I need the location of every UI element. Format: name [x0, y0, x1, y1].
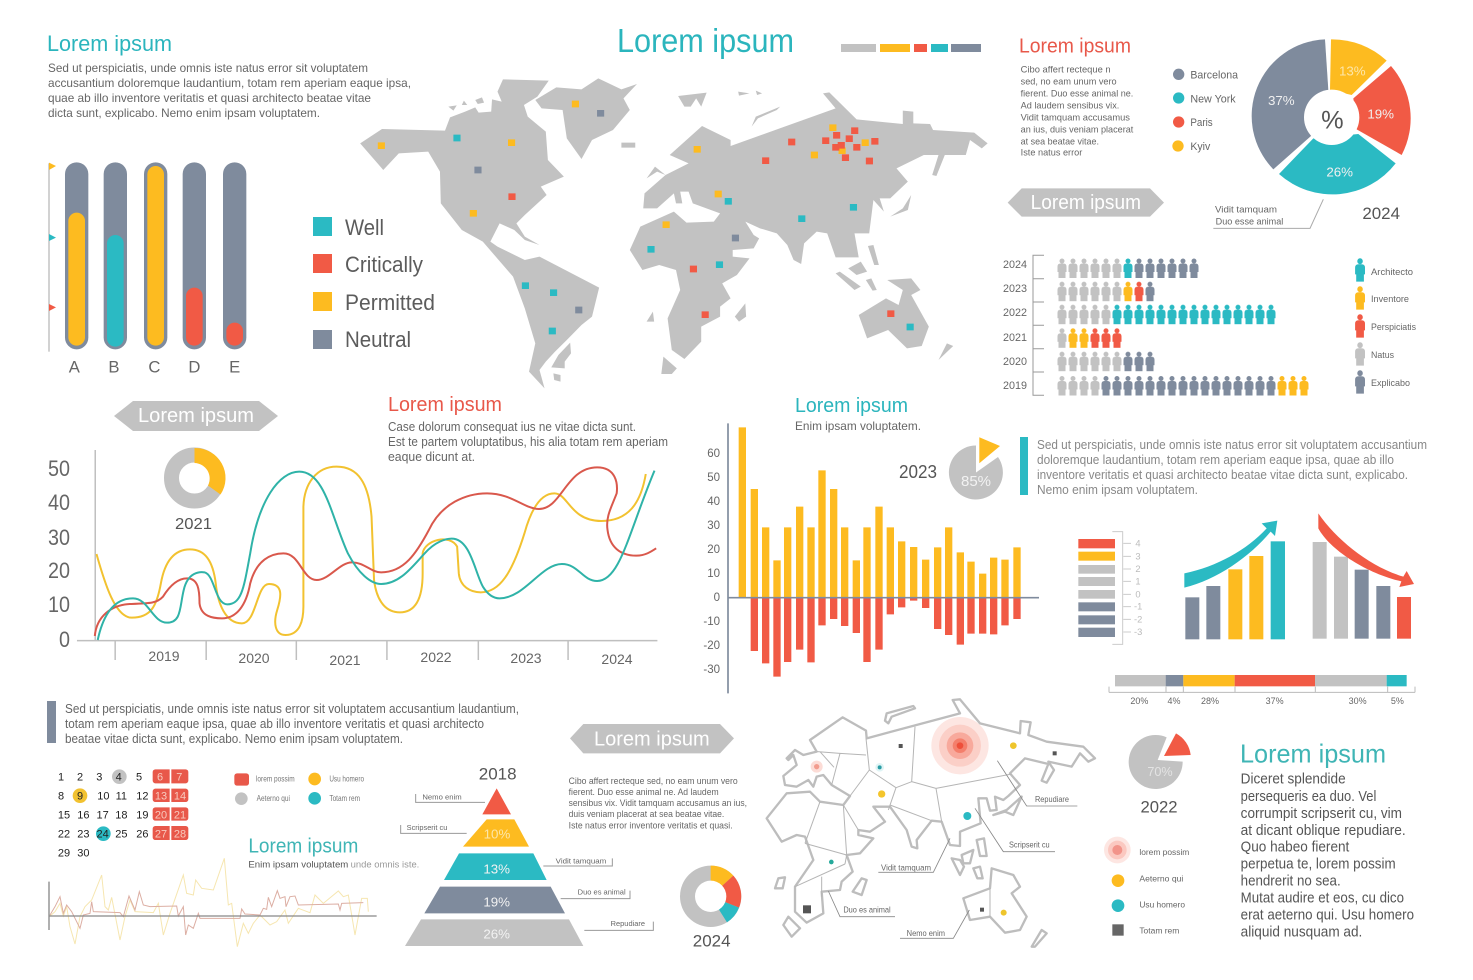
- chart: scale stack and trend bars: 4: [1135, 538, 1141, 548]
- chart: sparkline: [49, 858, 377, 947]
- chart: people pictogram: 2021: [1003, 332, 1027, 344]
- panel: top-left intro text: [47, 31, 411, 120]
- calendar: 21: [174, 809, 186, 821]
- text block: bottom-right: perpetua te, lorem possim: [1241, 857, 1396, 873]
- panel: top-right pie and text: fierent. Duo esse animal ne.: [1021, 88, 1133, 98]
- chart: scale stack and trend bars: 1: [1135, 576, 1141, 586]
- panel: top-right pie and text: sed, no eam unum vero: [1021, 76, 1117, 86]
- pyramid 2018: 10%: [484, 827, 510, 842]
- chart: multi-line curves 2019-2024: 20: [48, 558, 70, 583]
- panel: top-left intro text: quae ab illo inventore veritatis et quasi architecto beatae vitae: [48, 91, 371, 105]
- chart: vertical capsule bars A-E: [48, 162, 246, 377]
- chart: people pictogram: 2020: [1003, 356, 1027, 368]
- pie: 2023: 2023: [899, 462, 937, 482]
- chart: scale stack and trend bars: 3: [1135, 551, 1141, 561]
- panel: top-right pie and text: 37%: [1268, 93, 1295, 108]
- legend: people: Perspiciatis: [1371, 322, 1416, 333]
- heading: bar chart: Enim ipsam voluptatem.: [795, 419, 921, 433]
- chart: multi-line curves 2019-2024: 2020: [238, 650, 270, 666]
- calendar: 5: [136, 772, 142, 784]
- panel: top-right pie and text: Cibo affert recteque n: [1021, 64, 1111, 74]
- calendar: 14: [174, 791, 186, 803]
- chart: diverging bars: 30: [707, 520, 720, 532]
- text block: teal note: Sed ut perspiciatis, unde omnis iste natus error sit voluptatem accusantium: [1037, 438, 1427, 452]
- calendar: 19: [136, 809, 148, 821]
- heading: bar chart: [795, 395, 921, 433]
- chart: scale stack and trend bars: -3: [1134, 627, 1142, 637]
- legend: map status: Permitted: [345, 290, 435, 315]
- chart: diverging bars: 40: [707, 496, 720, 508]
- pyramid 2018: 19%: [483, 895, 510, 910]
- text block: teal note: Nemo enim ipsam voluptatem.: [1037, 483, 1198, 497]
- panel: top-left intro text: dicta sunt, explicabo. Nemo enim ipsam voluptatem.: [48, 106, 320, 120]
- text block: bottom-right: erat aeterno qui. Usu homero: [1241, 908, 1414, 924]
- chart: people pictogram: 2024: [1003, 259, 1027, 271]
- panel: top-right pie and text: at sea beatae vitae.: [1021, 136, 1099, 146]
- calendar: 2: [77, 772, 83, 784]
- pyramid 2018: Scripserit cu: [407, 823, 447, 832]
- chart: multi-line curves 2019-2024: 10: [48, 592, 70, 617]
- pyramid 2018: 13%: [483, 861, 510, 876]
- chart: diverging bars: [703, 423, 1039, 693]
- labels: outline map: Duo es animal: [843, 905, 891, 915]
- calendar: 6: [157, 772, 163, 784]
- calendar: 8: [58, 791, 64, 803]
- panel: top-right pie and text: New York: [1190, 93, 1236, 105]
- panel: top-right pie and text: 19%: [1367, 106, 1394, 121]
- text block: bottom-right: persequeris ea duo. Vel: [1241, 789, 1376, 805]
- chart: people pictogram: [1003, 255, 1310, 397]
- legend: calendar keys: Aeterno qui: [257, 794, 290, 803]
- chart: stacked percentage strip: 20%: [1130, 696, 1148, 706]
- text block: bottom-right: aliquid nusquam ad.: [1241, 925, 1362, 941]
- legend: map status: [313, 215, 435, 352]
- pyramid 2018: 2018: [479, 764, 517, 783]
- calendar: 27: [155, 829, 167, 841]
- chart: vertical capsule bars A-E: E: [229, 358, 240, 377]
- heading: sparkline: [248, 835, 419, 869]
- banner: [570, 724, 734, 753]
- text block: line chart note: Case dolorum consequat ius ne vitae dicta sunt.: [388, 420, 636, 434]
- text block: bottom-right: Mutat audire et eos, cu dico: [1241, 891, 1404, 907]
- labels: outline map: Scripserit cu: [1009, 840, 1050, 850]
- chart: multi-line curves 2019-2024: 2022: [420, 649, 452, 665]
- banner: Lorem ipsum: [594, 728, 710, 751]
- heading: bar chart: Lorem ipsum: [795, 395, 908, 417]
- legend: outline map: Aeterno qui: [1139, 873, 1183, 883]
- calendar: 18: [115, 809, 127, 821]
- chart: scale stack and trend bars: -1: [1134, 602, 1142, 612]
- donut: 2021: 2021: [175, 516, 212, 533]
- chart: diverging bars: -10: [703, 616, 720, 628]
- panel: bottom-right pie, legend and text: [1104, 733, 1414, 941]
- banner: line chart heading: [114, 401, 278, 431]
- calendar: 20: [155, 809, 167, 821]
- chart: multi-line curves 2019-2024: 2023: [510, 650, 542, 666]
- pie: 2022: [1129, 733, 1191, 816]
- chart: multi-line curves 2019-2024: 0: [59, 627, 70, 652]
- text block: pyramid note: sensibus vix. Vidit tamquam accusamus an ius,: [569, 798, 747, 808]
- calendar: 25: [115, 829, 127, 841]
- text block: teal note: inventore veritatis et quasi architecto beatae vitae dicta sunt, explicabo.: [1037, 468, 1408, 482]
- text block: line chart note: Est te partem voluptatibus, his alia totam rem aperiam: [388, 435, 668, 449]
- calendar: 17: [97, 809, 109, 821]
- legend: outline map: lorem possim: [1139, 847, 1189, 857]
- chart: diverging bars: 0: [714, 592, 720, 604]
- markers: outline map: [803, 717, 1057, 916]
- legend: calendar keys: Usu homero: [329, 774, 364, 783]
- legend: people: Explicabo: [1371, 378, 1410, 389]
- chart: diverging bars: -30: [703, 664, 720, 676]
- chart: diverging bars: -20: [703, 640, 720, 652]
- text block: line chart note: [388, 394, 668, 464]
- legend: map status: Well: [345, 215, 384, 240]
- panel: top-right pie and text: Ad laudem sensibus vix.: [1021, 100, 1119, 110]
- panel: top-right pie and text: 26%: [1326, 164, 1353, 179]
- chart: diverging bars: 50: [707, 472, 720, 484]
- pyramid 2018: [401, 764, 653, 946]
- text block: bottom-right: Lorem ipsum: [1240, 739, 1386, 769]
- chart: people pictogram: 2023: [1003, 283, 1027, 295]
- calendar: 4: [116, 772, 122, 784]
- calendar: 22: [58, 829, 70, 841]
- panel: top-right pie and text: %: [1321, 106, 1344, 134]
- pyramid 2018: 26%: [483, 926, 510, 941]
- calendar: 9: [77, 791, 83, 803]
- pie: 2022: 2022: [1140, 797, 1178, 816]
- panel: top-right pie and text: Paris: [1190, 117, 1213, 129]
- chart: stacked percentage strip: [1109, 675, 1415, 706]
- panel: pyramid, banner, note and donut: [401, 724, 747, 951]
- calendar: 28: [174, 829, 186, 841]
- calendar: 1: [58, 772, 64, 784]
- text block: pyramid note: [569, 776, 747, 830]
- calendar: 15: [58, 809, 70, 821]
- chart: vertical capsule bars A-E: C: [148, 358, 160, 377]
- panel: top-left intro text: Lorem ipsum: [47, 31, 172, 56]
- pie: 2023: 85%: [961, 473, 991, 490]
- chart: multi-line curves 2019-2024: 50: [48, 456, 70, 481]
- chart: people pictogram: 2019: [1003, 380, 1027, 392]
- calendar: 10: [97, 791, 109, 803]
- pie: 2022: 70%: [1147, 765, 1173, 779]
- text block: pyramid note: Iste natus error inventore veritatis et quasi.: [569, 820, 733, 830]
- legend: people: Natus: [1371, 350, 1394, 361]
- calendar: 24: [97, 829, 109, 841]
- chart: diverging bars: 60: [707, 448, 720, 460]
- chart: scale stack and trend bars: -2: [1134, 614, 1142, 624]
- legend: outline map: Totam rem: [1139, 925, 1179, 935]
- pyramid 2018: Nemo enim: [422, 792, 462, 801]
- pyramid 2018: Repudiare: [611, 919, 645, 928]
- panel: top-right pie and text: an ius, duis veniam placerat: [1021, 124, 1134, 134]
- calendar: 11: [116, 791, 127, 803]
- calendar: 3: [96, 772, 102, 784]
- chart: multi-line curves 2019-2024: 2019: [148, 648, 180, 664]
- legend: outline map: Usu homero: [1139, 899, 1185, 909]
- legend: people: [1355, 258, 1416, 394]
- chart: multi-line curves 2019-2024: [48, 450, 657, 668]
- chart: vertical capsule bars A-E: A: [69, 358, 81, 377]
- panel: top-right pie and text: Vidit tamquam accusamus: [1021, 112, 1130, 122]
- heading: sparkline: unde omnis iste.: [351, 859, 419, 869]
- legend: calendar keys: [234, 773, 364, 805]
- chart: people pictogram: 2022: [1003, 307, 1027, 319]
- chart: stacked percentage strip: 37%: [1266, 696, 1284, 706]
- legend: calendar keys: lorem possim: [256, 774, 295, 783]
- text block: teal note: [1020, 437, 1427, 497]
- chart: multi-line curves 2019-2024: 30: [48, 525, 70, 550]
- legend: calendar keys: Totam rem: [329, 794, 360, 803]
- banner: line chart heading: Lorem ipsum: [138, 405, 254, 427]
- calendar: 26: [136, 829, 148, 841]
- outline map with callouts: [767, 699, 1095, 947]
- chart: vertical capsule bars A-E: D: [188, 358, 200, 377]
- panel: top-left intro text: accusantium doloremque laudantium, totam rem aperiam eaque ipsa,: [48, 76, 411, 90]
- panel: top-left intro text: Sed ut perspiciatis, unde omnis iste natus error sit voluptatem: [48, 61, 368, 75]
- title colour strip: [841, 44, 981, 52]
- labels: outline map: Vidit tamquam: [881, 862, 931, 872]
- chart: stacked percentage strip: 5%: [1391, 696, 1404, 706]
- legend: people: Inventore: [1371, 294, 1409, 305]
- calendar: 7: [176, 772, 182, 784]
- panel: top-right pie and text: Vidit tamquam: [1215, 205, 1277, 215]
- chart: scale stack and trend bars: 2: [1135, 564, 1141, 574]
- heading: sparkline: Lorem ipsum: [248, 835, 358, 857]
- labels: outline map: Nemo enim: [907, 928, 945, 938]
- donut: 2024: [680, 866, 741, 951]
- text block: bottom-right: [1240, 739, 1414, 941]
- panel: top-right pie and text: Lorem ipsum: [1019, 36, 1131, 58]
- calendar: 16: [77, 809, 89, 821]
- legend: outline map: [1104, 837, 1189, 936]
- calendar: 13: [155, 791, 167, 803]
- donut: 2024: 2024: [693, 932, 731, 951]
- chart: diverging bars: 10: [707, 568, 720, 580]
- text block: pyramid note: duis veniam placerat at sea beatae vitae.: [569, 809, 724, 819]
- calendar: 30: [77, 848, 89, 860]
- panel: top-right pie and text: Kyiv: [1190, 141, 1211, 153]
- text block: bottom-right: hendrerit no sea.: [1241, 874, 1341, 890]
- text block: lower-left note: totam rem aperiam eaque ipsa, quae ab illo inventore veritatis et quasi architecto: [65, 717, 484, 731]
- text block: line chart note: Lorem ipsum: [388, 394, 502, 416]
- calendar: 12: [136, 791, 148, 803]
- calendar: 29: [58, 848, 70, 860]
- panel: top-right pie and text: Barcelona: [1190, 69, 1239, 81]
- pie: 2023: [899, 437, 1003, 499]
- text block: pyramid note: fierent. Duo esse animal ne. Ad laudem: [569, 787, 719, 797]
- legend: map status: Critically: [345, 252, 423, 277]
- panel: top-right pie and text: 13%: [1339, 64, 1366, 79]
- text block: bottom-right: Quo habeo fierent: [1241, 840, 1349, 856]
- calendar: [58, 769, 188, 860]
- labels: outline map: [843, 794, 1069, 938]
- text block: bottom-right: at dicant oblique repudiare.: [1241, 823, 1406, 839]
- panel: top-right pie and text: 2024: [1362, 204, 1400, 223]
- chart: vertical capsule bars A-E: B: [108, 358, 120, 377]
- text block: line chart note: eaque dicunt at.: [388, 450, 475, 464]
- legend: map status: Neutral: [345, 327, 411, 352]
- pyramid 2018: Duo es animal: [578, 888, 626, 897]
- chart: multi-line curves 2019-2024: 2024: [601, 651, 633, 667]
- heading: sparkline: Enim ipsam voluptatem: [248, 859, 348, 869]
- chart: stacked percentage strip: 30%: [1349, 696, 1367, 706]
- panel: calendar, legend and sparkline: [49, 769, 419, 947]
- text block: bottom-right: Diceret splendide: [1241, 771, 1346, 787]
- panel: top-right pie and text: [1008, 36, 1411, 228]
- text block: lower-left note: [47, 701, 519, 746]
- chart: stacked percentage strip: 28%: [1201, 696, 1219, 706]
- text block: lower-left note: beatae vitae dicta sunt, explicabo. Nemo enim ipsam voluptatem.: [65, 732, 403, 746]
- text block: bottom-right: corrumpit scripserit cu, vim: [1241, 806, 1402, 822]
- panel: top-right pie and text: Lorem ipsum: [1031, 192, 1141, 214]
- world map: [360, 78, 988, 388]
- panel: top-right pie and text: Iste natus error: [1021, 148, 1082, 158]
- pyramid 2018: Vidit tamquam: [556, 856, 606, 865]
- chart: stacked percentage strip: 4%: [1167, 696, 1180, 706]
- panel: top-right pie and text: Duo esse animal: [1216, 217, 1283, 227]
- chart: diverging bars: 20: [707, 544, 720, 556]
- chart: scale stack and trend bars: [1078, 513, 1415, 706]
- chart: multi-line curves 2019-2024: 2021: [329, 652, 361, 668]
- donut: 2021: [172, 448, 226, 533]
- labels: outline map: Repudiare: [1035, 794, 1069, 804]
- chart: scale stack and trend bars: 0: [1135, 589, 1141, 599]
- text block: teal note: doloremque laudantium, totam rem aperiam eaque ipsa, quae ab illo: [1037, 453, 1394, 467]
- chart: multi-line curves 2019-2024: 40: [48, 490, 70, 515]
- main title: Lorem ipsum: [617, 22, 794, 59]
- text block: pyramid note: Cibo affert recteque sed, no eam unum vero: [569, 776, 738, 786]
- legend: people: Architecto: [1371, 267, 1413, 278]
- text block: lower-left note: Sed ut perspiciatis, unde omnis iste natus error sit voluptatem accusantium laudantium,: [65, 702, 519, 716]
- calendar: 23: [77, 829, 89, 841]
